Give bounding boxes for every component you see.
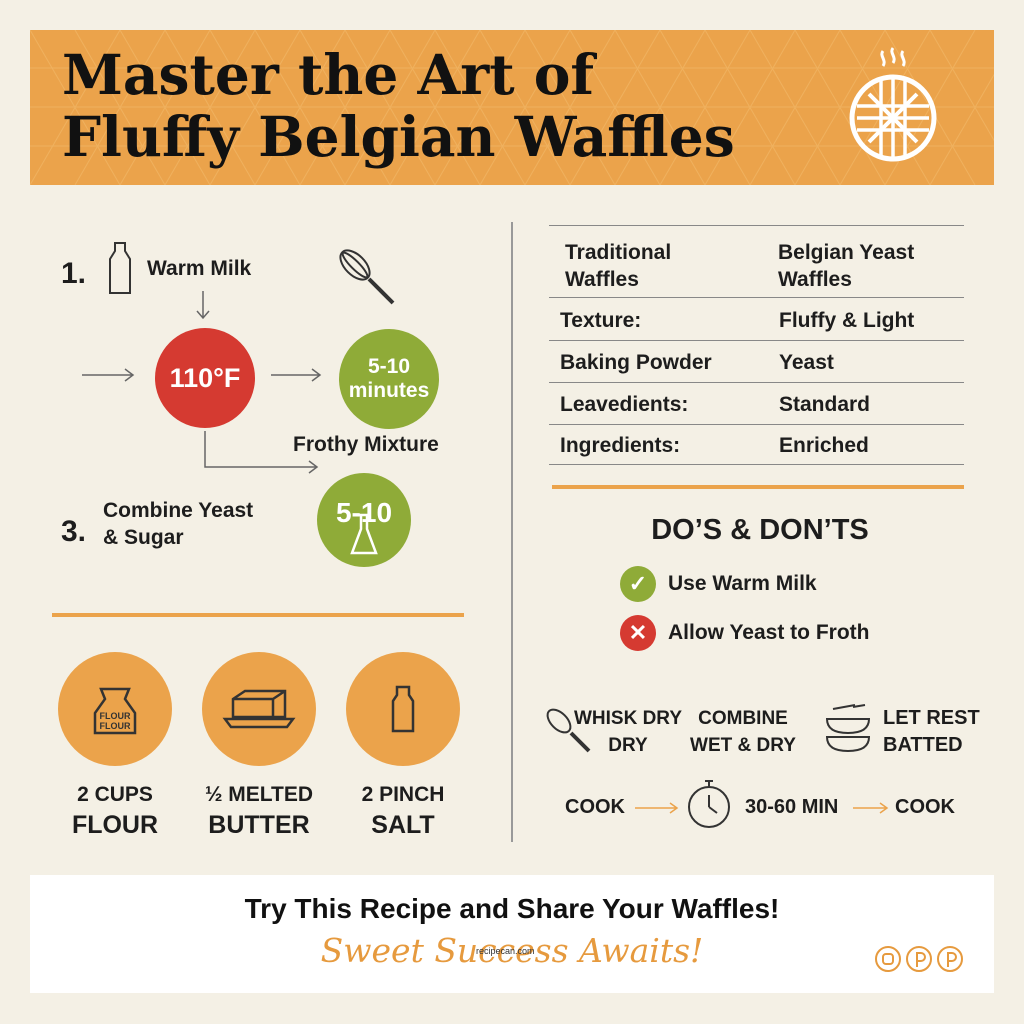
step 1 label: 1.: [61, 257, 86, 290]
circle: 5-10 minutes: minutes: [349, 379, 429, 402]
comparison table: Belgian Yeast: [778, 241, 914, 264]
circle: 5-10 minutes: 5-10: [368, 355, 410, 378]
panel: ingredients: FLOUR: [100, 711, 131, 721]
process steps: BATTED: [883, 734, 963, 756]
comparison table: [549, 225, 964, 465]
comparison table: Baking Powder: [560, 351, 712, 374]
panel: steps: Combine Yeast: [103, 499, 253, 522]
process steps: COOK: [895, 796, 955, 818]
panel: ingredients: ½ MELTED: [205, 783, 313, 806]
comparison table: Enriched: [779, 434, 869, 457]
dos and donts: [620, 514, 869, 651]
process steps: WHISK DRY: [574, 708, 682, 729]
title: Master the Art of: [62, 42, 594, 107]
process steps: [546, 704, 980, 828]
divider vertical: [511, 222, 513, 842]
process steps: COOK: [565, 796, 625, 818]
footer callout: Try This Recipe and Share Your Waffles!: [245, 893, 779, 924]
panel: ingredients: 2 PINCH: [362, 783, 444, 806]
icon: milk bottle: [109, 242, 131, 294]
panel: ingredients: 2 CUPS: [77, 783, 153, 806]
comparison table: Waffles: [778, 268, 852, 291]
panel: steps: Frothy Mixture: [293, 433, 439, 456]
comparison table: Fluffy & Light: [779, 309, 914, 332]
comparison table: Yeast: [779, 351, 834, 374]
circle: 5-10 flask: 5-10: [336, 497, 392, 528]
footer callout: Sweet Success Awaits!: [321, 931, 703, 970]
comparison table: Ingredients:: [560, 434, 680, 457]
process steps: WET & DRY: [690, 735, 796, 756]
dos and donts: Use Warm Milk: [668, 572, 817, 595]
panel: ingredients: FLOUR: [72, 811, 158, 839]
footer callout: recipecan.com: [476, 946, 535, 956]
circle: 5-10 flask: [317, 473, 411, 567]
footer callout: [30, 875, 994, 993]
panel: ingredients: FLOUR: [100, 721, 131, 731]
process steps: COMBINE: [698, 708, 788, 729]
comparison table: Standard: [779, 393, 870, 416]
panel: ingredients: BUTTER: [208, 811, 310, 839]
circle: 5-10 minutes: [339, 329, 439, 429]
process steps: LET REST: [883, 707, 980, 729]
comparison table: Waffles: [565, 268, 639, 291]
comparison table: Leavedients:: [560, 393, 688, 416]
circle: 110F: [155, 328, 255, 428]
process steps: 30-60 MIN: [745, 796, 838, 818]
comparison table: Traditional: [565, 241, 671, 264]
panel: steps: [61, 242, 439, 567]
dos and donts: Allow Yeast to Froth: [668, 621, 869, 644]
circle: 110F: 110°F: [170, 362, 240, 392]
divider: [52, 613, 464, 617]
dos and donts: ✓: [629, 571, 647, 596]
header banner: [30, 30, 994, 185]
panel: ingredients: SALT: [371, 811, 435, 839]
panel: steps: Warm Milk: [147, 257, 251, 280]
panel: ingredients: [58, 652, 460, 839]
process steps: DRY: [608, 735, 648, 756]
panel: steps: 3.: [61, 515, 86, 548]
arrows: [82, 291, 322, 474]
panel: steps: & Sugar: [103, 526, 184, 549]
title: [62, 42, 735, 169]
icon: waffle: [850, 47, 936, 162]
dos and donts: ✕: [629, 620, 647, 645]
comparison table: Texture:: [560, 309, 641, 332]
icons: social: [875, 946, 963, 972]
icon: whisk: [339, 249, 394, 304]
dos and donts: DO’S & DON’TS: [651, 514, 869, 546]
title: Fluffy Belgian Waffles: [62, 104, 735, 169]
